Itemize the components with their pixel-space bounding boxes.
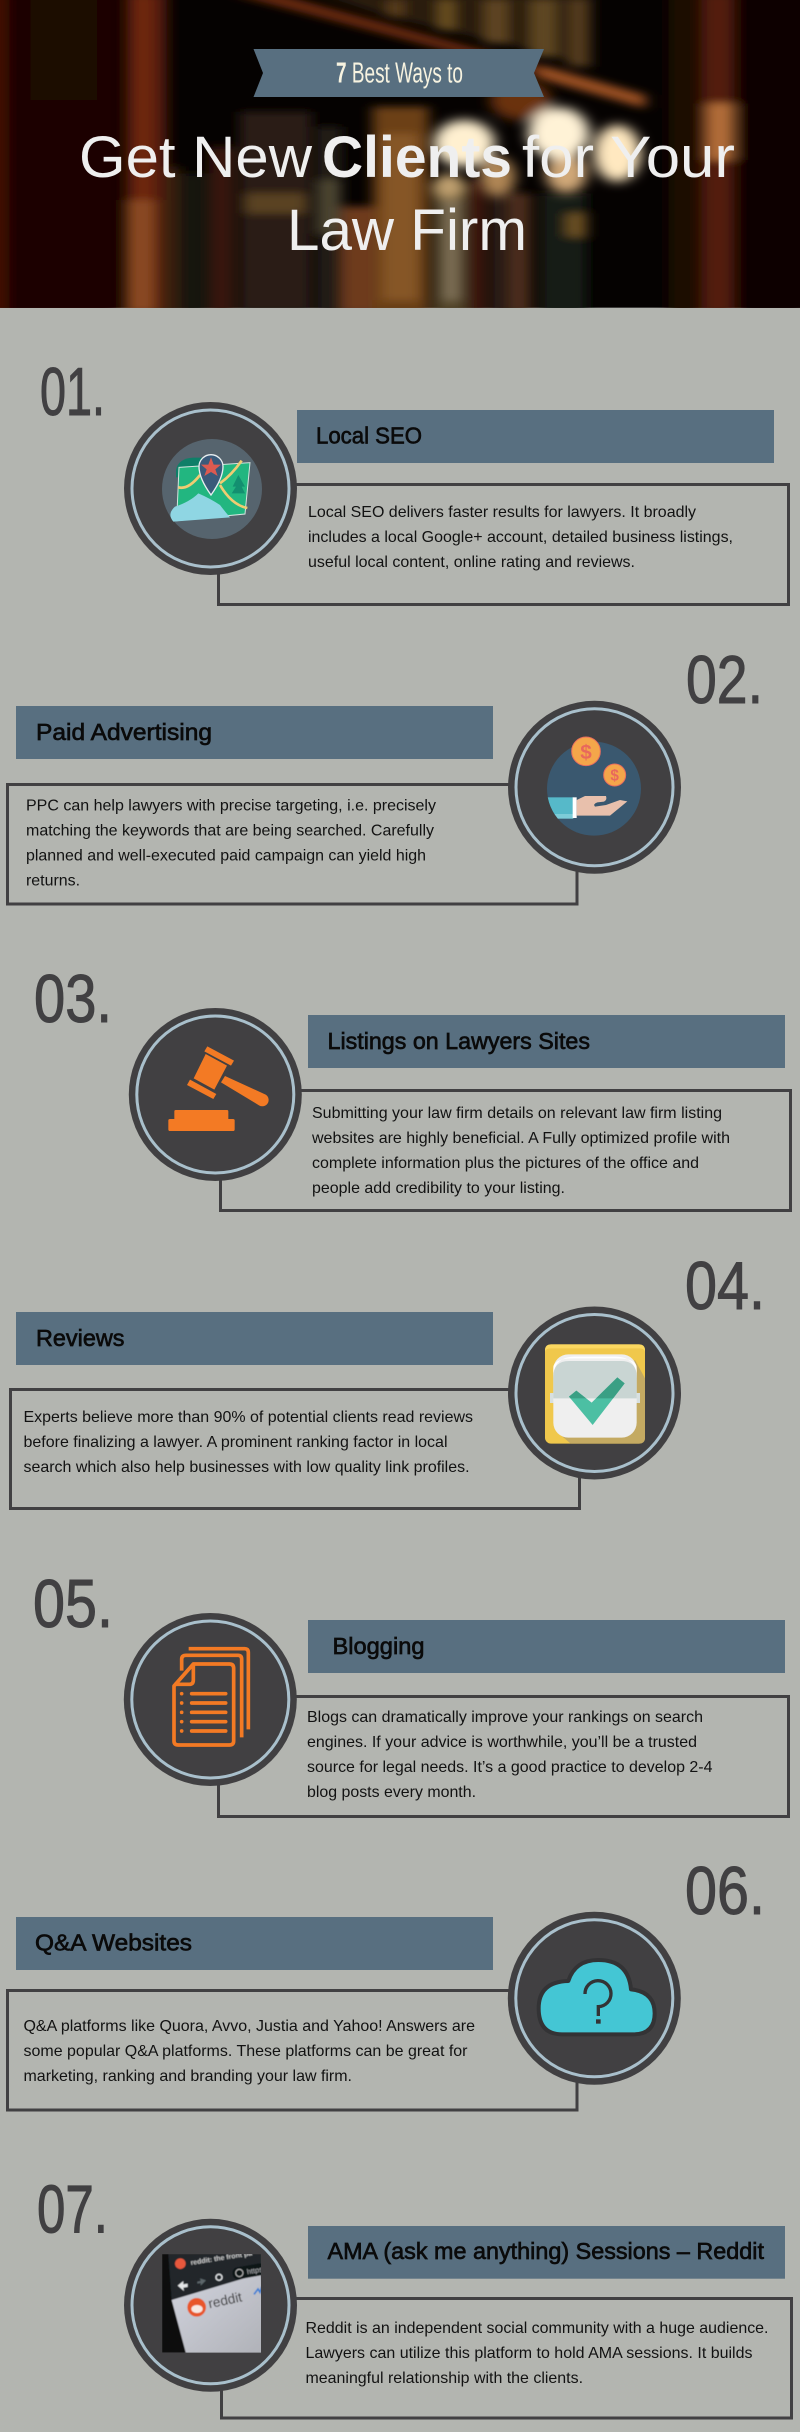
title: Clients [322,125,512,190]
image: reddit browser screenshot [162,2254,261,2353]
text box: matching the keywords that are being searched. Carefully [26,822,434,840]
title: Law Firm [287,198,527,263]
heading bar [16,706,493,759]
icon: document stack [174,1649,248,1745]
icon: hand with coins: $ [610,768,619,785]
text box: Submitting your law firm details on relevant law firm listing [312,1105,722,1122]
circle badge [124,1613,297,1786]
title: for Your [522,125,735,190]
title: Get New [79,125,313,190]
heading bar [16,1312,493,1365]
heading bar: AMA (ask me anything) Sessions – Reddit [328,2238,765,2264]
circle badge [124,402,297,575]
text box: Lawyers can utilize this platform to hold AMA sessions. It builds [306,2345,752,2362]
panel: 01 Local SEO [40,354,788,604]
circle badge [124,2219,297,2392]
panel: 02 Paid Advertising [8,642,763,904]
panel: 03 Listings on Lawyers Sites [34,961,790,1210]
text box [220,1090,790,1210]
circle badge [129,1008,302,1181]
image: reddit browser screenshot: https [246,2265,264,2276]
text box: Local SEO delivers faster results for lawyers. It broadly [308,504,696,521]
header photo: blurred bookshelf [0,0,800,313]
number 04: 04. [685,1248,765,1324]
text box [222,2298,792,2418]
heading bar: Listings on Lawyers Sites [328,1028,590,1054]
text box: people add credibility to your listing. [312,1180,565,1197]
text box: websites are highly beneficial. A Fully optimized profile with [311,1130,730,1147]
icon: hand with coins: $ [580,741,592,764]
text box: PPC can help lawyers with precise targeting, i.e. precisely [26,798,436,814]
heading bar [308,2226,785,2279]
panel: 04 Reviews [10,1248,765,1508]
text box [10,1390,580,1508]
text box [8,1990,577,2110]
image: reddit browser screenshot: reddit [207,2289,244,2311]
text box: includes a local Google+ account, detailed business listings, [308,529,733,546]
number 07: 07. [37,2172,108,2248]
text box: complete information plus the pictures of the office and [312,1155,699,1172]
text box: source for legal needs. It’s a good practice to develop 2-4 [307,1759,713,1776]
icon: hand with coins [543,737,641,836]
icon: map with pin [162,439,262,539]
ribbon banner [254,49,544,97]
icon: checklist card [545,1344,645,1444]
text box: before finalizing a lawyer. A prominent ranking factor in local [24,1434,448,1451]
text box: marketing, ranking and branding your law firm. [24,2068,352,2085]
heading bar [297,410,774,463]
text box [218,1696,788,1816]
title [82,134,734,250]
icon: cloud with question mark [539,1960,655,2034]
text box: engines. If your advice is worthwhile, you’ll be a trusted [307,1734,697,1751]
text box: search which also help businesses with low quality link profiles. [24,1459,470,1476]
text box: planned and well-executed paid campaign can yield high [26,848,426,864]
heading bar: Local SEO [316,422,422,448]
number 03: 03. [34,961,112,1037]
text box [218,484,788,604]
text box: returns. [26,872,80,890]
heading bar: Reviews [36,1325,124,1351]
heading bar [16,1917,493,1970]
heading bar: Paid Advertising [36,719,212,745]
panel: 07 AMA Sessions [37,2172,792,2418]
number 02: 02. [686,642,763,718]
text box: Blogs can dramatically improve your rankings on search [307,1709,703,1726]
panel: 06 Q&A Websites [8,1853,765,2110]
text box [8,784,577,904]
circle badge [508,1912,681,2085]
text box: Reddit is an independent social community with a huge audience. [306,2320,768,2337]
text box: Q&A platforms like Quora, Avvo, Justia and Yahoo! Answers are [24,2018,475,2035]
circle badge [508,1306,681,1480]
text box: useful local content, online rating and reviews. [308,554,635,571]
text box: some popular Q&A platforms. These platforms can be great for [24,2043,468,2060]
heading bar [308,1015,785,1068]
icon: gavel [168,1046,269,1131]
image: reddit browser screenshot: reddit: the front pa [190,2250,253,2267]
number 05: 05. [33,1566,113,1642]
circle badge [508,701,681,874]
heading bar: Blogging [332,1633,424,1659]
panel: 05 Blogging [33,1566,788,1816]
header panel [0,0,800,313]
number 01: 01. [40,354,105,430]
heading bar: Q&A Websites [35,1930,192,1956]
text box: blog posts every month. [307,1784,476,1801]
banner text: 7 Best Ways to [336,58,463,90]
heading bar [308,1620,785,1673]
text box: Experts believe more than 90% of potential clients read reviews [24,1409,473,1426]
number 06: 06. [685,1853,765,1929]
text box: meaningful relationship with the clients. [306,2370,583,2387]
